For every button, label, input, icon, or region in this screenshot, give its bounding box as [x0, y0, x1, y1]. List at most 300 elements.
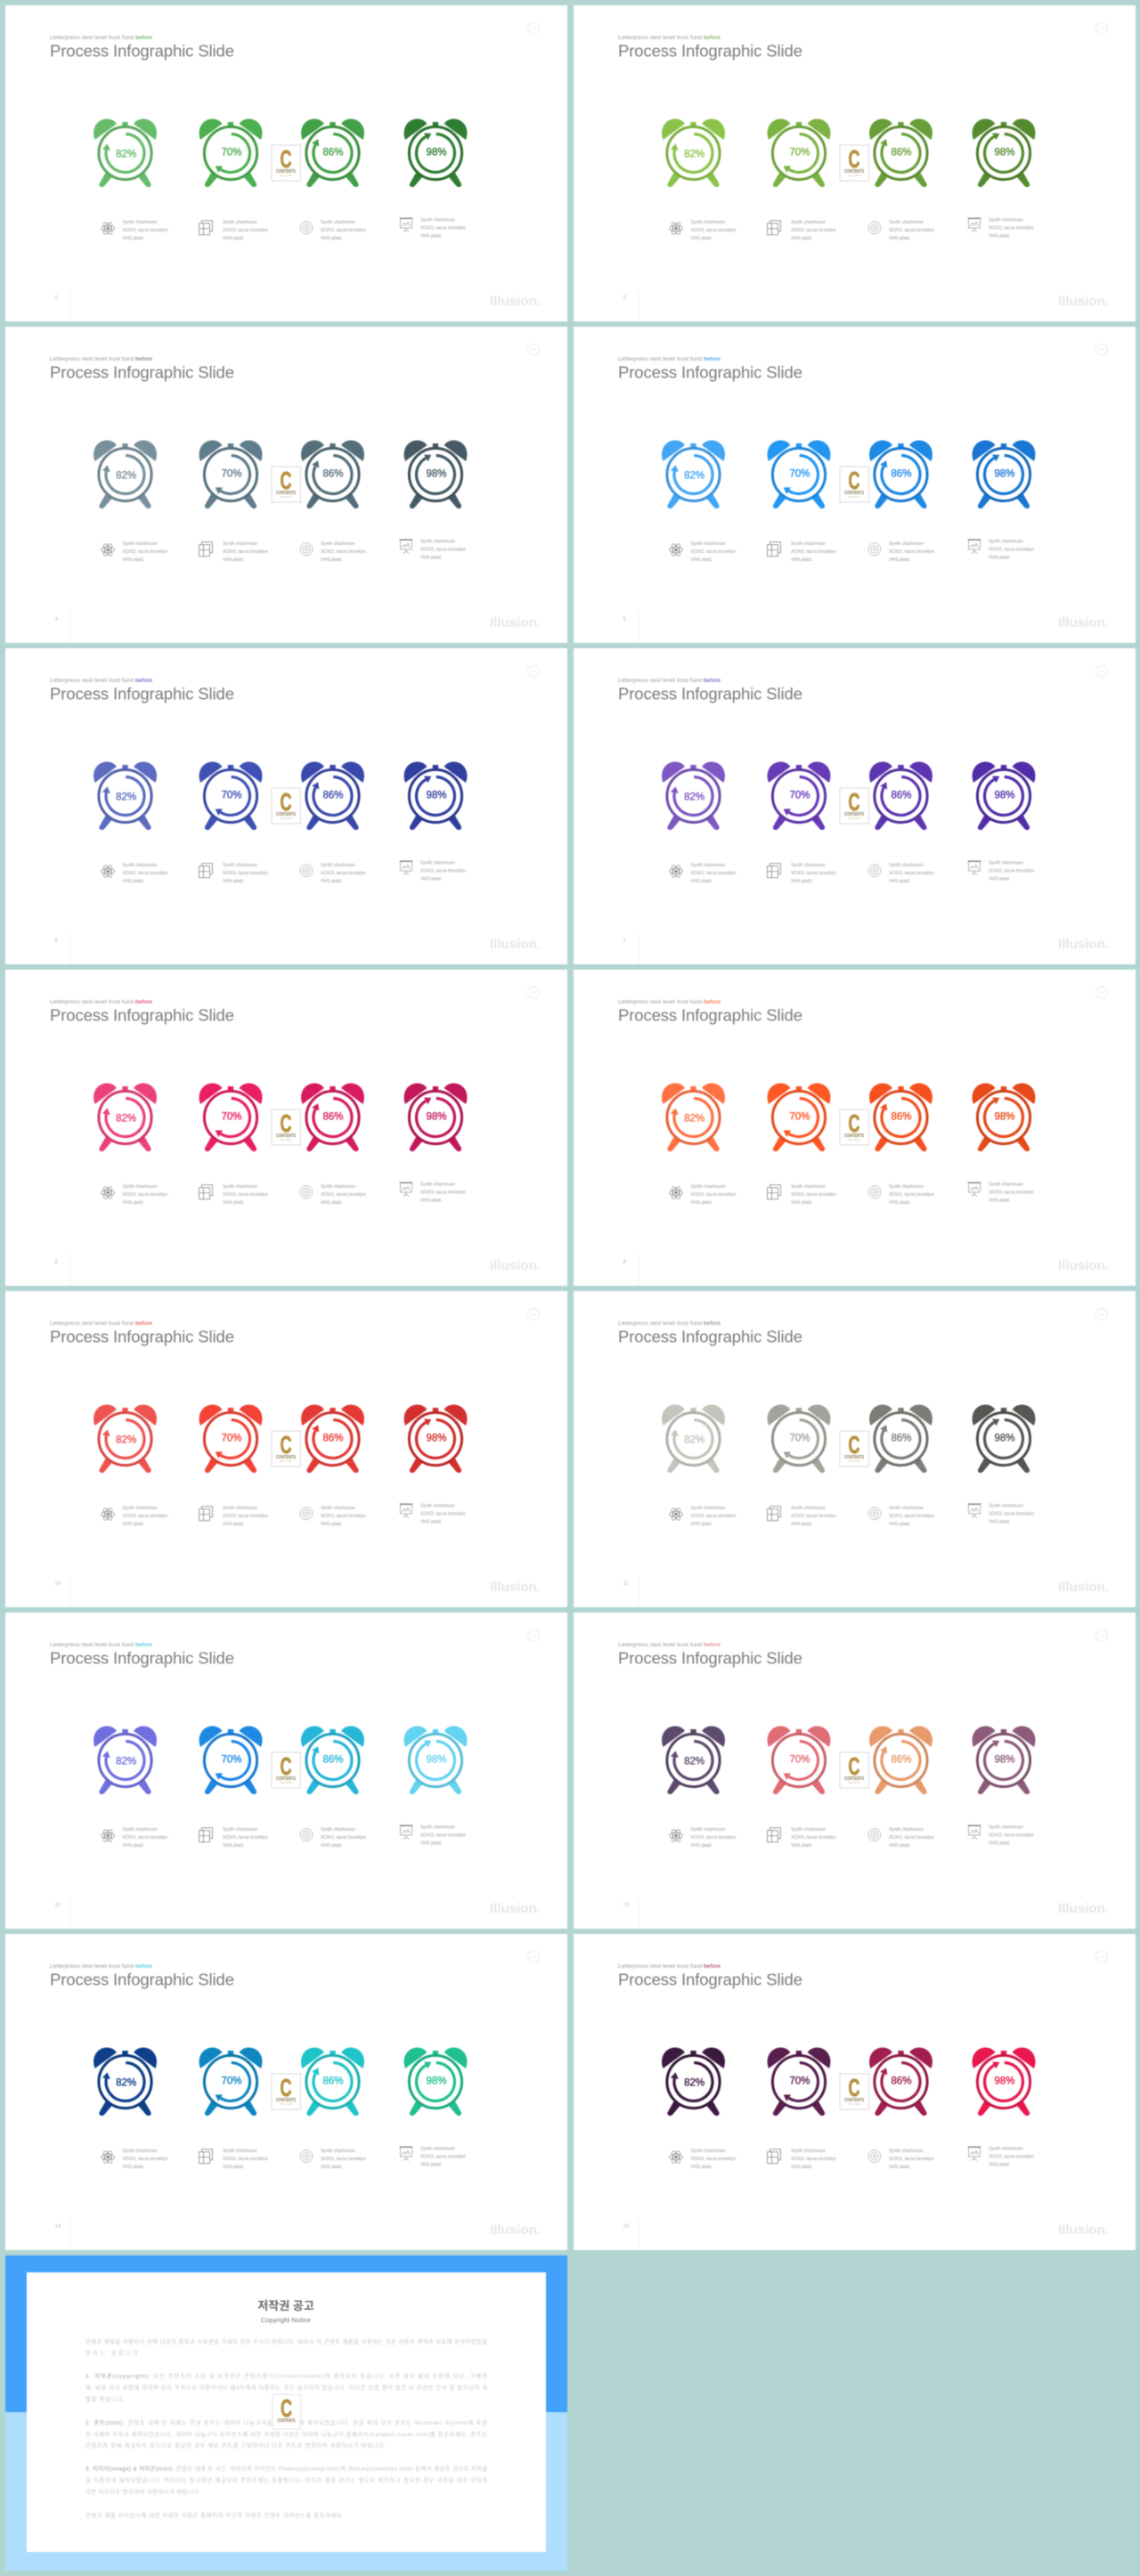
logo badge: MAIL CAFE	[280, 2103, 292, 2106]
logo badge	[272, 1752, 301, 1788]
feature 4	[967, 860, 1034, 882]
alarm clock 70%: 70%	[789, 1434, 810, 1444]
alarm clock 82%: 82%	[116, 149, 136, 159]
feature 4: XOXO, tacos brooklyn	[989, 2155, 1034, 2160]
notice section 3 image and icon: 을 이용하여 제작되었습니다. 이미지는 참고용만 제공되며 콘텐츠에는 포함됩니다. 이미지 품질 관리는 별도로 확인하고 필요한 경우 사진을 새로 구하여	[86, 2476, 487, 2484]
feature 3: Synth chartreuse	[321, 2149, 355, 2154]
alarm clock 98%: 98%	[426, 469, 447, 480]
page number: 9	[623, 1260, 627, 1265]
notice section 1 copyright	[86, 2371, 487, 2403]
feature 4	[399, 217, 466, 239]
feature 3: Synth chartreuse	[889, 1184, 924, 1190]
icon: menu circle	[527, 1629, 540, 1641]
feature 2: Synth chartreuse	[791, 2149, 826, 2154]
feature 4: XOXO, tacos brooklyn	[420, 548, 466, 553]
alarm clock 98%: 98%	[994, 1112, 1015, 1123]
alarm clock 70%: 70%	[221, 148, 242, 158]
feature 1: XOXO, tacos brooklyn	[123, 549, 167, 555]
heading: Process Infographic Slide	[618, 1649, 802, 1667]
heading: Letterpress next level trust fund before	[618, 1642, 721, 1648]
alarm clock 82%: 82%	[116, 1113, 136, 1124]
alarm clock 98%: 98%	[426, 148, 447, 158]
brand wordmark: Illusion.	[490, 294, 541, 309]
alarm clock 86%	[869, 118, 932, 187]
logo badge: MAIL CAFE	[848, 1782, 860, 1784]
alarm clock 70%	[768, 1083, 830, 1151]
feature 1: Synth chartreuse	[691, 220, 726, 225]
alarm clock 98%: 98%	[426, 791, 447, 801]
panel: slide 4 blue grey	[5, 327, 567, 643]
logo badge: CONTENTS	[276, 1134, 297, 1139]
logo badge: C	[280, 1752, 292, 1780]
alarm clock 82%: 82%	[684, 149, 704, 159]
feature 1: VHS plaid.	[123, 879, 144, 884]
feature 4: VHS plaid.	[420, 1519, 442, 1524]
feature 1: XOXO, tacos brooklyn	[691, 1835, 736, 1841]
feature 1: Synth chartreuse	[691, 863, 726, 868]
logo badge	[840, 1109, 869, 1145]
logo badge: C	[280, 1431, 292, 1459]
heading: Letterpress next level trust fund before	[618, 678, 721, 684]
icon: menu circle	[527, 22, 540, 34]
alarm clock 98%: 98%	[426, 1755, 447, 1766]
heading: Letterpress next level trust fund before	[50, 678, 152, 684]
alarm clock 70%: 70%	[221, 1434, 242, 1444]
feature 1	[102, 220, 167, 241]
feature 4: Synth chartreuse	[989, 860, 1023, 865]
feature 3: VHS plaid.	[321, 879, 342, 884]
panel: slide 11 grey	[574, 1291, 1136, 1607]
feature 1	[102, 863, 167, 884]
alarm clock 86%	[869, 761, 932, 830]
alarm clock 82%: 82%	[684, 470, 704, 481]
feature 4: Synth chartreuse	[989, 2146, 1023, 2151]
logo badge: CONTENTS	[278, 2418, 296, 2424]
logo badge: CONTENTS	[276, 2098, 297, 2103]
feature 1: VHS plaid.	[691, 557, 712, 563]
feature 2: VHS plaid.	[791, 879, 812, 884]
feature 3: XOXO, tacos brooklyn	[321, 1514, 366, 1519]
alarm clock 70%	[200, 440, 262, 508]
feature 1	[102, 1827, 167, 1849]
feature 2	[768, 220, 836, 241]
feature 3: VHS plaid.	[889, 1200, 910, 1206]
feature 3: VHS plaid.	[321, 1200, 342, 1206]
feature 4	[399, 1824, 466, 1846]
icon: menu circle	[1095, 1308, 1108, 1320]
icon: menu circle	[1095, 665, 1108, 677]
feature 4: XOXO, tacos brooklyn	[420, 1512, 466, 1517]
feature 2	[768, 1827, 836, 1849]
alarm clock 86%	[301, 761, 364, 830]
heading: Process Infographic Slide	[618, 363, 802, 381]
alarm clock 82%: 82%	[684, 792, 704, 802]
panel: slide 14 navy to teal	[5, 1934, 567, 2250]
icon: menu circle	[1095, 987, 1108, 998]
alarm clock 86%: 86%	[891, 1755, 912, 1766]
feature 4: VHS plaid.	[420, 876, 442, 882]
icon: menu circle	[1095, 1629, 1108, 1641]
feature 2: Synth chartreuse	[791, 1506, 826, 1511]
alarm clock 86%: 86%	[891, 2076, 912, 2087]
feature 3: XOXO, tacos brooklyn	[889, 1514, 934, 1519]
brand wordmark: Illusion.	[1058, 1258, 1109, 1273]
feature 4: VHS plaid.	[989, 876, 1010, 882]
heading: Letterpress next level trust fund before	[50, 1642, 152, 1648]
feature 2: Synth chartreuse	[223, 220, 257, 225]
feature 3	[868, 220, 934, 241]
page number	[623, 611, 639, 643]
alarm clock 82%: 82%	[116, 2077, 136, 2088]
notice section 1 copyright: 벌을 받습니다.	[86, 2395, 125, 2403]
logo badge: MAIL CAFE	[280, 1782, 292, 1784]
feature 4	[399, 1503, 466, 1524]
feature 2: Synth chartreuse	[791, 863, 826, 868]
alarm clock 98%	[973, 440, 1035, 508]
brand wordmark: Illusion.	[1058, 1580, 1109, 1595]
feature 1: XOXO, tacos brooklyn	[691, 2157, 736, 2162]
brand wordmark: Illusion.	[1058, 1901, 1109, 1916]
page number: 12	[55, 1903, 61, 1908]
feature 2: XOXO, tacos brooklyn	[223, 871, 268, 876]
feature 3	[300, 1506, 366, 1527]
alarm clock 82%	[94, 761, 157, 830]
feature 3: Synth chartreuse	[889, 1827, 924, 1832]
logo badge: MAIL CAFE	[848, 817, 860, 820]
feature 3: XOXO, tacos brooklyn	[321, 549, 366, 555]
feature 3: XOXO, tacos brooklyn	[321, 228, 366, 233]
logo badge	[272, 467, 301, 502]
logo badge: CONTENTS	[844, 491, 865, 496]
logo badge: MAIL CAFE	[848, 175, 860, 177]
feature 3	[868, 1506, 934, 1527]
feature 1	[102, 1184, 167, 1206]
page number: 5	[623, 617, 627, 622]
feature 1	[670, 1506, 736, 1527]
notice section 1 copyright: 제, 비용 자기 위법에 의하여 영리 목적으로 이용하거나 제3자에게 이용하는 것은 금지되어 있습니다. 이러한 모방 행위 발견 시 관련된 민사 및 형사상의 처	[86, 2383, 487, 2391]
alarm clock 98%	[404, 440, 467, 508]
panel: copyright notice	[5, 2255, 567, 2571]
logo badge: CONTENTS	[276, 1455, 297, 1460]
heading: Process Infographic Slide	[618, 41, 802, 61]
feature 2: XOXO, tacos brooklyn	[223, 1192, 268, 1198]
alarm clock 98%	[973, 1726, 1035, 1794]
panel: slide 15 wine	[574, 1934, 1136, 2250]
heading: Letterpress next level trust fund before	[50, 1963, 152, 1970]
page number	[55, 611, 70, 643]
heading: Process Infographic Slide	[50, 1970, 234, 1989]
feature 2: VHS plaid.	[791, 1200, 812, 1206]
feature 2: VHS plaid.	[791, 1843, 812, 1849]
feature 3: VHS plaid.	[321, 236, 342, 241]
alarm clock 70%	[200, 761, 262, 830]
alarm clock 86%: 86%	[322, 148, 344, 158]
feature 2	[768, 1184, 836, 1206]
feature 1	[670, 2149, 736, 2170]
notice section 1 copyright: 1. 저작권(copyright): 모든 콘텐츠의 소유 및 저작권은 콘텐츠뱅크(Contentsbank)에 제작되어 있습니다. 사전 승낙 없이 모방해 이상, 구매한	[86, 2371, 487, 2379]
alarm clock 82%	[94, 2047, 157, 2116]
alarm clock 98%	[973, 1083, 1035, 1151]
alarm clock 70%: 70%	[789, 148, 810, 158]
alarm clock 98%: 98%	[994, 1755, 1015, 1766]
alarm clock 70%	[768, 440, 830, 508]
heading: Letterpress next level trust fund before	[50, 999, 152, 1005]
logo badge	[840, 2074, 869, 2109]
feature 1: VHS plaid.	[691, 1200, 712, 1206]
alarm clock 86%	[869, 1726, 932, 1794]
page number: 7	[623, 939, 627, 944]
feature 3: XOXO, tacos brooklyn	[321, 2157, 366, 2162]
alarm clock 86%: 86%	[322, 1112, 344, 1123]
feature 2: VHS plaid.	[223, 1522, 244, 1527]
panel: slide 3 light green	[574, 5, 1136, 321]
feature 2	[768, 863, 836, 884]
page number: 13	[623, 1903, 630, 1908]
page number: 11	[623, 1581, 629, 1587]
page number	[623, 289, 639, 321]
logo badge: C	[848, 1752, 860, 1780]
feature 2	[200, 1506, 268, 1527]
heading: Process Infographic Slide	[50, 1327, 234, 1346]
alarm clock 82%	[662, 2047, 725, 2116]
feature 4: VHS plaid.	[989, 555, 1010, 560]
alarm clock 70%	[768, 2047, 830, 2116]
alarm clock 98%: 98%	[426, 1434, 447, 1444]
feature 2	[768, 1506, 836, 1527]
logo badge	[272, 1109, 301, 1145]
alarm clock 70%	[768, 1726, 830, 1794]
notice intro: 콘텐츠 제품을 사용하기 전에 다음의 항목과 소유권을 자세히 읽어 주시기 바랍니다. 따라서 이 콘텐츠 제품을 사용하는 것은 사용자 계약과 보호에 동의하였음을	[86, 2337, 487, 2345]
alarm clock 98%: 98%	[426, 1112, 447, 1123]
feature 2: Synth chartreuse	[791, 1184, 826, 1190]
brand wordmark: Illusion.	[490, 1901, 541, 1916]
feature 1: VHS plaid.	[123, 2165, 144, 2170]
alarm clock 98%: 98%	[994, 2076, 1015, 2087]
heading: Process Infographic Slide	[618, 684, 802, 703]
alarm clock 70%	[200, 1083, 262, 1151]
feature 2: VHS plaid.	[791, 557, 812, 563]
feature 1	[670, 863, 736, 884]
icon: menu circle	[1095, 344, 1108, 355]
page number	[55, 1575, 70, 1607]
logo badge	[840, 1431, 869, 1467]
logo badge: CONTENTS	[276, 812, 297, 817]
feature 2: Synth chartreuse	[223, 1827, 257, 1832]
icon: menu circle	[527, 987, 540, 998]
alarm clock 70%	[200, 118, 262, 187]
feature 4: XOXO, tacos brooklyn	[989, 1833, 1034, 1839]
panel: slide 13 mauve and coral	[574, 1613, 1136, 1929]
feature 4	[399, 860, 466, 882]
feature 3	[868, 2149, 934, 2170]
alarm clock 82%	[662, 1404, 725, 1473]
feature 2	[200, 863, 268, 884]
panel: slide 2 green	[5, 5, 567, 321]
alarm clock 98%: 98%	[994, 791, 1015, 801]
alarm clock 82%	[94, 440, 157, 508]
feature 3: XOXO, tacos brooklyn	[889, 1192, 934, 1198]
feature 3	[300, 2149, 366, 2170]
logo badge: MAIL CAFE	[280, 175, 292, 177]
feature 2	[200, 541, 268, 563]
feature 3	[868, 1184, 934, 1206]
feature 3: Synth chartreuse	[321, 863, 355, 868]
notice intro	[86, 2337, 487, 2356]
feature 3: VHS plaid.	[889, 557, 910, 563]
page number	[623, 1254, 639, 1286]
alarm clock 70%: 70%	[789, 791, 810, 801]
feature 3: VHS plaid.	[889, 236, 910, 241]
logo badge: MAIL CAFE	[280, 496, 292, 499]
feature 3: VHS plaid.	[321, 557, 342, 563]
logo badge: C	[280, 788, 292, 816]
feature 3: XOXO, tacos brooklyn	[889, 871, 934, 876]
page number	[623, 932, 639, 964]
alarm clock 82%	[662, 1083, 725, 1151]
feature 2: XOXO, tacos brooklyn	[223, 1835, 268, 1841]
feature 1: VHS plaid.	[123, 1843, 144, 1849]
feature 2	[768, 2149, 836, 2170]
feature 3: Synth chartreuse	[889, 2149, 924, 2154]
feature 4	[967, 1182, 1034, 1203]
feature 4: Synth chartreuse	[420, 860, 455, 865]
feature 1: XOXO, tacos brooklyn	[123, 1835, 167, 1841]
alarm clock 86%	[301, 1083, 364, 1151]
heading: Letterpress next level trust fund before	[50, 35, 152, 41]
panel: slide 9 orange	[574, 970, 1136, 1286]
logo badge: MAIL CAFE	[848, 1460, 860, 1463]
alarm clock 70%	[200, 2047, 262, 2116]
feature 2: Synth chartreuse	[791, 1827, 826, 1832]
alarm clock 86%	[301, 118, 364, 187]
page number: 14	[55, 2224, 61, 2230]
page number: 3	[623, 296, 627, 301]
feature 4	[967, 1824, 1034, 1846]
feature 2: XOXO, tacos brooklyn	[791, 1192, 836, 1198]
logo badge	[272, 2074, 301, 2109]
alarm clock 98%: 98%	[994, 148, 1015, 158]
feature 2: VHS plaid.	[791, 1522, 812, 1527]
logo badge: MAIL CAFE	[280, 817, 292, 820]
feature 1	[102, 541, 167, 563]
logo badge: C	[280, 145, 292, 173]
feature 4: XOXO, tacos brooklyn	[989, 226, 1034, 232]
feature 1: VHS plaid.	[123, 1200, 144, 1206]
feature 1: XOXO, tacos brooklyn	[691, 871, 736, 876]
notice title	[257, 2299, 314, 2324]
logo badge: C	[848, 2074, 860, 2101]
alarm clock 98%	[404, 1083, 467, 1151]
logo badge: C	[280, 2074, 292, 2101]
feature 1: Synth chartreuse	[691, 1506, 726, 1511]
feature 4: XOXO, tacos brooklyn	[420, 1833, 466, 1839]
heading: Process Infographic Slide	[50, 1006, 234, 1024]
page number: 6	[55, 939, 59, 944]
page number	[55, 2218, 70, 2250]
feature 2: Synth chartreuse	[791, 541, 826, 547]
feature 3: Synth chartreuse	[321, 1506, 355, 1511]
alarm clock 82%	[662, 761, 725, 830]
panel: slide 5 blue	[574, 327, 1136, 643]
feature 3	[300, 1184, 366, 1206]
heading: Letterpress next level trust fund before	[618, 35, 721, 41]
feature 1: XOXO, tacos brooklyn	[123, 871, 167, 876]
logo badge: C	[281, 2394, 292, 2422]
panel: slide 7 purple	[574, 648, 1136, 964]
feature 4	[967, 1503, 1034, 1524]
alarm clock 70%: 70%	[789, 1112, 810, 1123]
feature 3: VHS plaid.	[889, 2165, 910, 2170]
feature 4: Synth chartreuse	[989, 217, 1023, 223]
feature 4: VHS plaid.	[989, 1841, 1010, 1846]
feature 2: Synth chartreuse	[791, 220, 826, 225]
feature 2	[200, 1827, 268, 1849]
feature 4: Synth chartreuse	[420, 1824, 455, 1830]
alarm clock 98%	[973, 118, 1035, 187]
feature 4: XOXO, tacos brooklyn	[989, 1512, 1034, 1517]
logo badge: CONTENTS	[276, 169, 297, 175]
feature 4: Synth chartreuse	[420, 1503, 455, 1508]
logo badge: MAIL CAFE	[848, 496, 860, 499]
feature 3: XOXO, tacos brooklyn	[321, 871, 366, 876]
feature 2: VHS plaid.	[791, 2165, 812, 2170]
alarm clock 86%	[869, 440, 932, 508]
alarm clock 82%: 82%	[116, 470, 136, 481]
logo badge: MAIL CAFE	[280, 1139, 292, 1142]
brand wordmark: Illusion.	[1058, 615, 1109, 630]
heading: Process Infographic Slide	[618, 1006, 802, 1024]
notice section 2 font: 2. 폰트(font): 콘텐츠 내에 된 서체는 한글 폰트는 네이버 나눔고딕을 사용했으며 제작되었습니다. 한글 외의 모든 폰트는 Windows System에 포함	[86, 2418, 487, 2426]
feature 1: XOXO, tacos brooklyn	[123, 1192, 167, 1198]
feature 1	[102, 1506, 167, 1527]
feature 3: VHS plaid.	[321, 1843, 342, 1849]
alarm clock 86%: 86%	[322, 1755, 344, 1766]
feature 4: VHS plaid.	[420, 2162, 442, 2167]
logo badge: CONTENTS	[844, 2098, 865, 2103]
heading: Process Infographic Slide	[50, 363, 234, 381]
feature 1: VHS plaid.	[123, 1522, 144, 1527]
page number	[55, 289, 70, 321]
feature 2: XOXO, tacos brooklyn	[223, 1514, 268, 1519]
feature 1	[670, 1827, 736, 1849]
brand wordmark: Illusion.	[1058, 937, 1109, 952]
feature 3: Synth chartreuse	[321, 220, 355, 225]
alarm clock 82%: 82%	[684, 1756, 704, 1767]
feature 3: Synth chartreuse	[321, 1184, 355, 1190]
feature 4: Synth chartreuse	[989, 539, 1023, 544]
feature 4	[399, 2146, 466, 2167]
feature 2: Synth chartreuse	[223, 1506, 257, 1511]
feature 1: VHS plaid.	[691, 2165, 712, 2170]
feature 1: VHS plaid.	[691, 1843, 712, 1849]
feature 3	[300, 541, 366, 563]
heading: Letterpress next level trust fund before	[618, 1321, 721, 1327]
feature 1: VHS plaid.	[691, 879, 712, 884]
feature 2: XOXO, tacos brooklyn	[791, 228, 836, 233]
page number: 10	[55, 1581, 61, 1587]
alarm clock 82%: 82%	[116, 792, 136, 802]
heading: Letterpress next level trust fund before	[618, 999, 721, 1005]
feature 1: XOXO, tacos brooklyn	[691, 228, 736, 233]
logo badge: MAIL CAFE	[848, 2103, 860, 2106]
feature 3: VHS plaid.	[889, 1843, 910, 1849]
alarm clock 98%	[404, 118, 467, 187]
alarm clock 98%	[404, 1404, 467, 1473]
feature 3: Synth chartreuse	[889, 1506, 924, 1511]
alarm clock 86%: 86%	[891, 469, 912, 480]
brand wordmark: Illusion.	[490, 615, 541, 630]
alarm clock 86%: 86%	[322, 1434, 344, 1444]
